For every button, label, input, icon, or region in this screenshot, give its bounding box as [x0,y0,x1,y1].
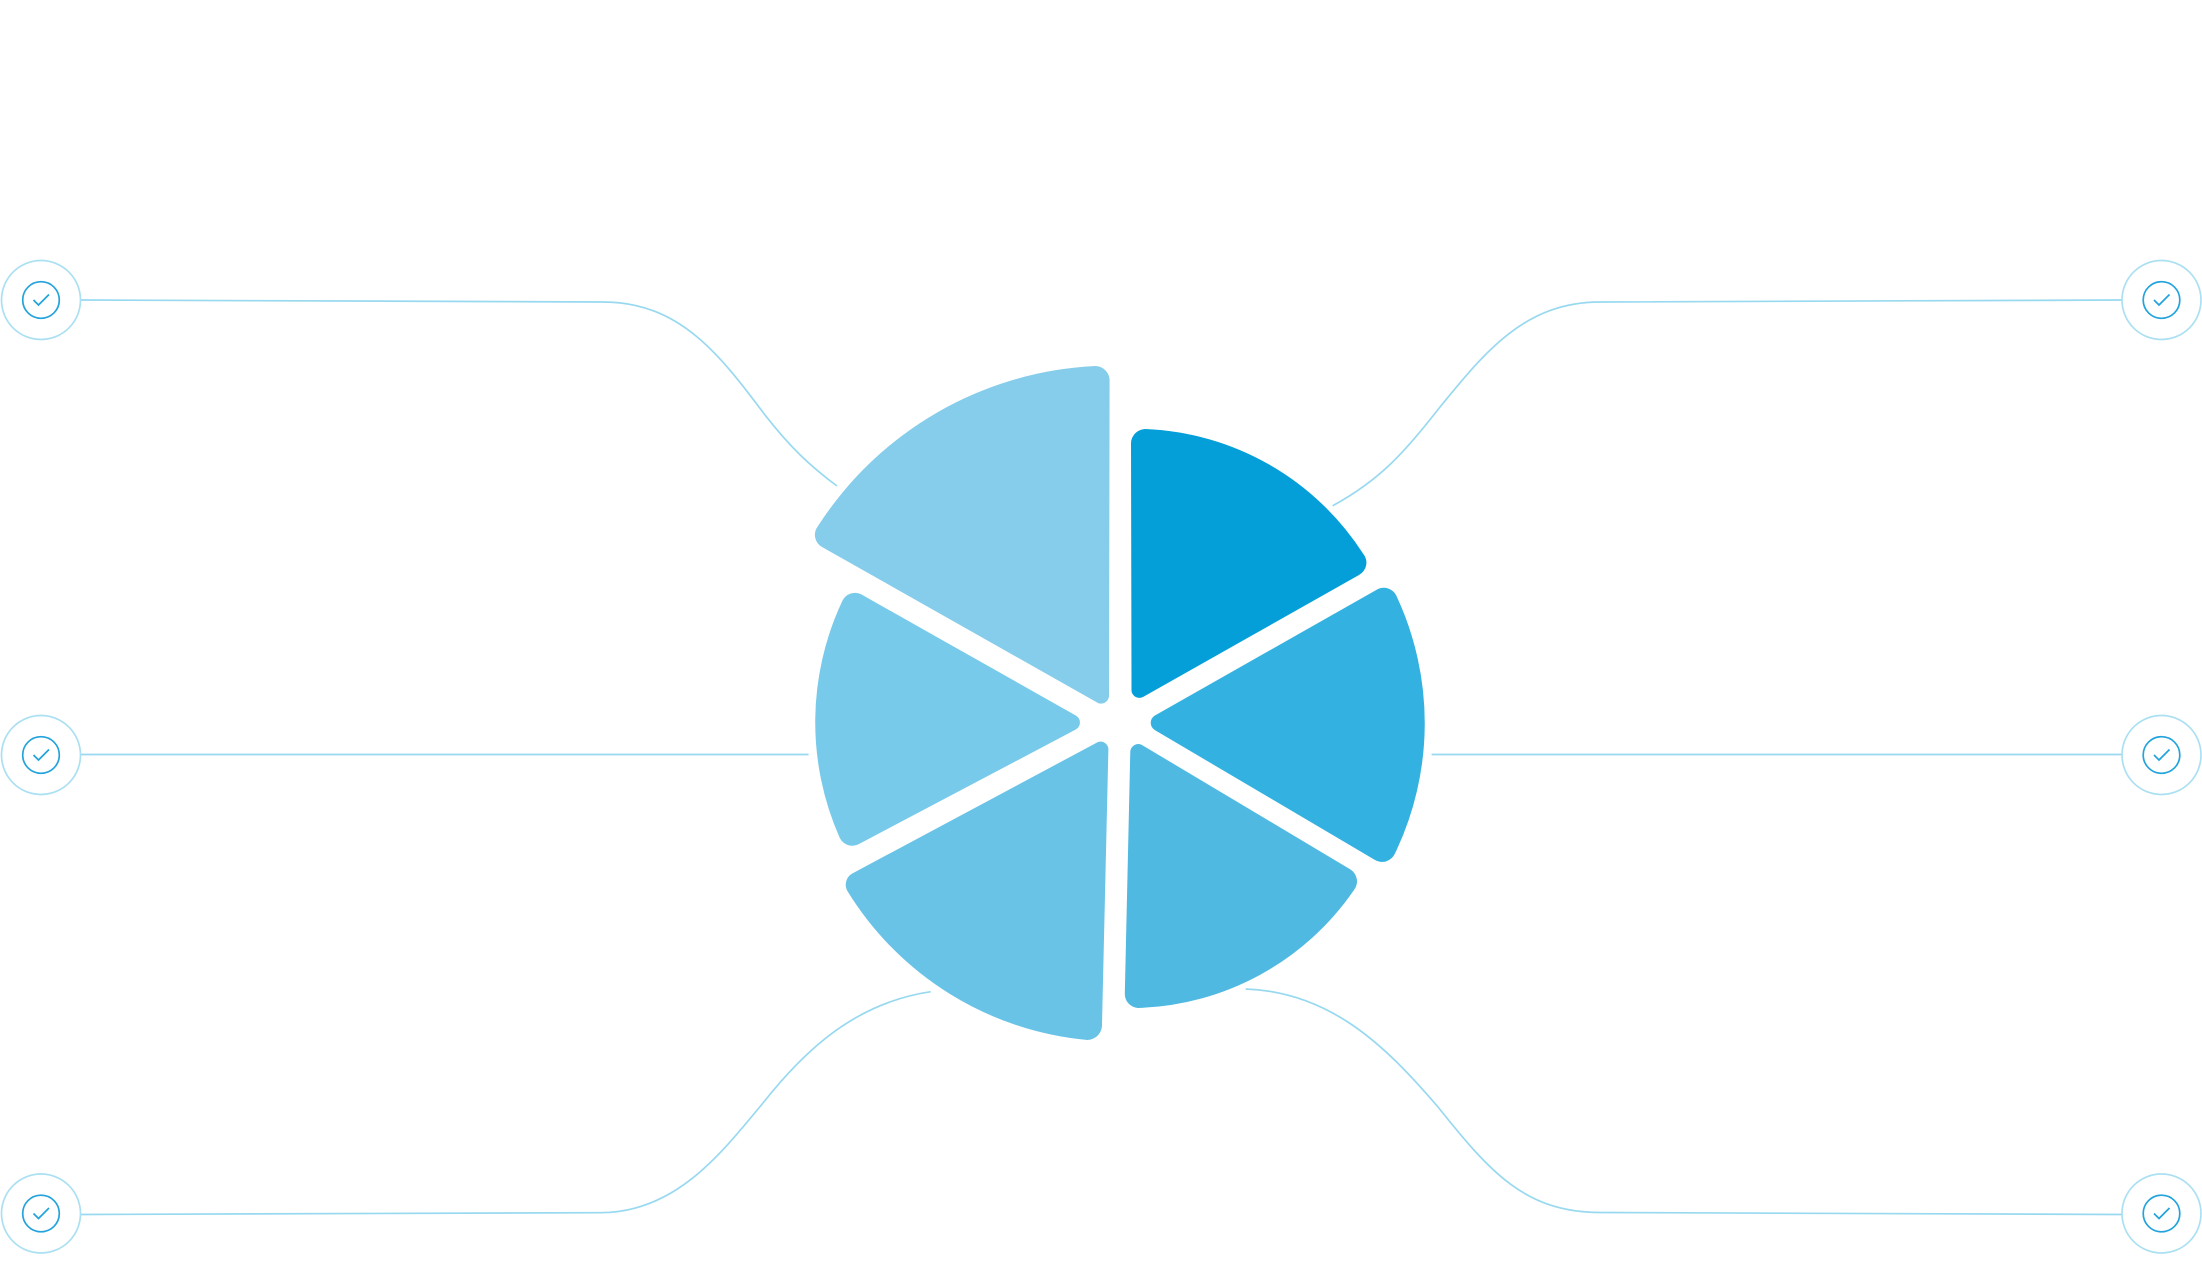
icon: check badge middle left [2,716,80,794]
connector: top left [80,300,837,486]
icon: check badge top right [2122,260,2201,340]
connector: bottom left [80,992,931,1214]
segment: top right [1131,429,1366,698]
connector: top right [1333,300,2122,506]
segment: top left [815,366,1110,704]
segment: bottom right [1125,744,1357,1008]
icon: check badge bottom left [2,1174,80,1253]
connector lines [80,300,2122,1214]
icon: check badge top left [2,260,80,340]
pie chart [815,366,1425,1040]
segment: right [1151,588,1425,862]
connector: middle right [1432,754,2122,756]
icon: check badge middle right [2122,716,2201,794]
connector: bottom right [1246,989,2122,1214]
segment: left [815,593,1080,846]
segment: bottom left [846,742,1108,1040]
icon: check badge bottom right [2122,1174,2201,1253]
connector: middle left [80,754,809,756]
